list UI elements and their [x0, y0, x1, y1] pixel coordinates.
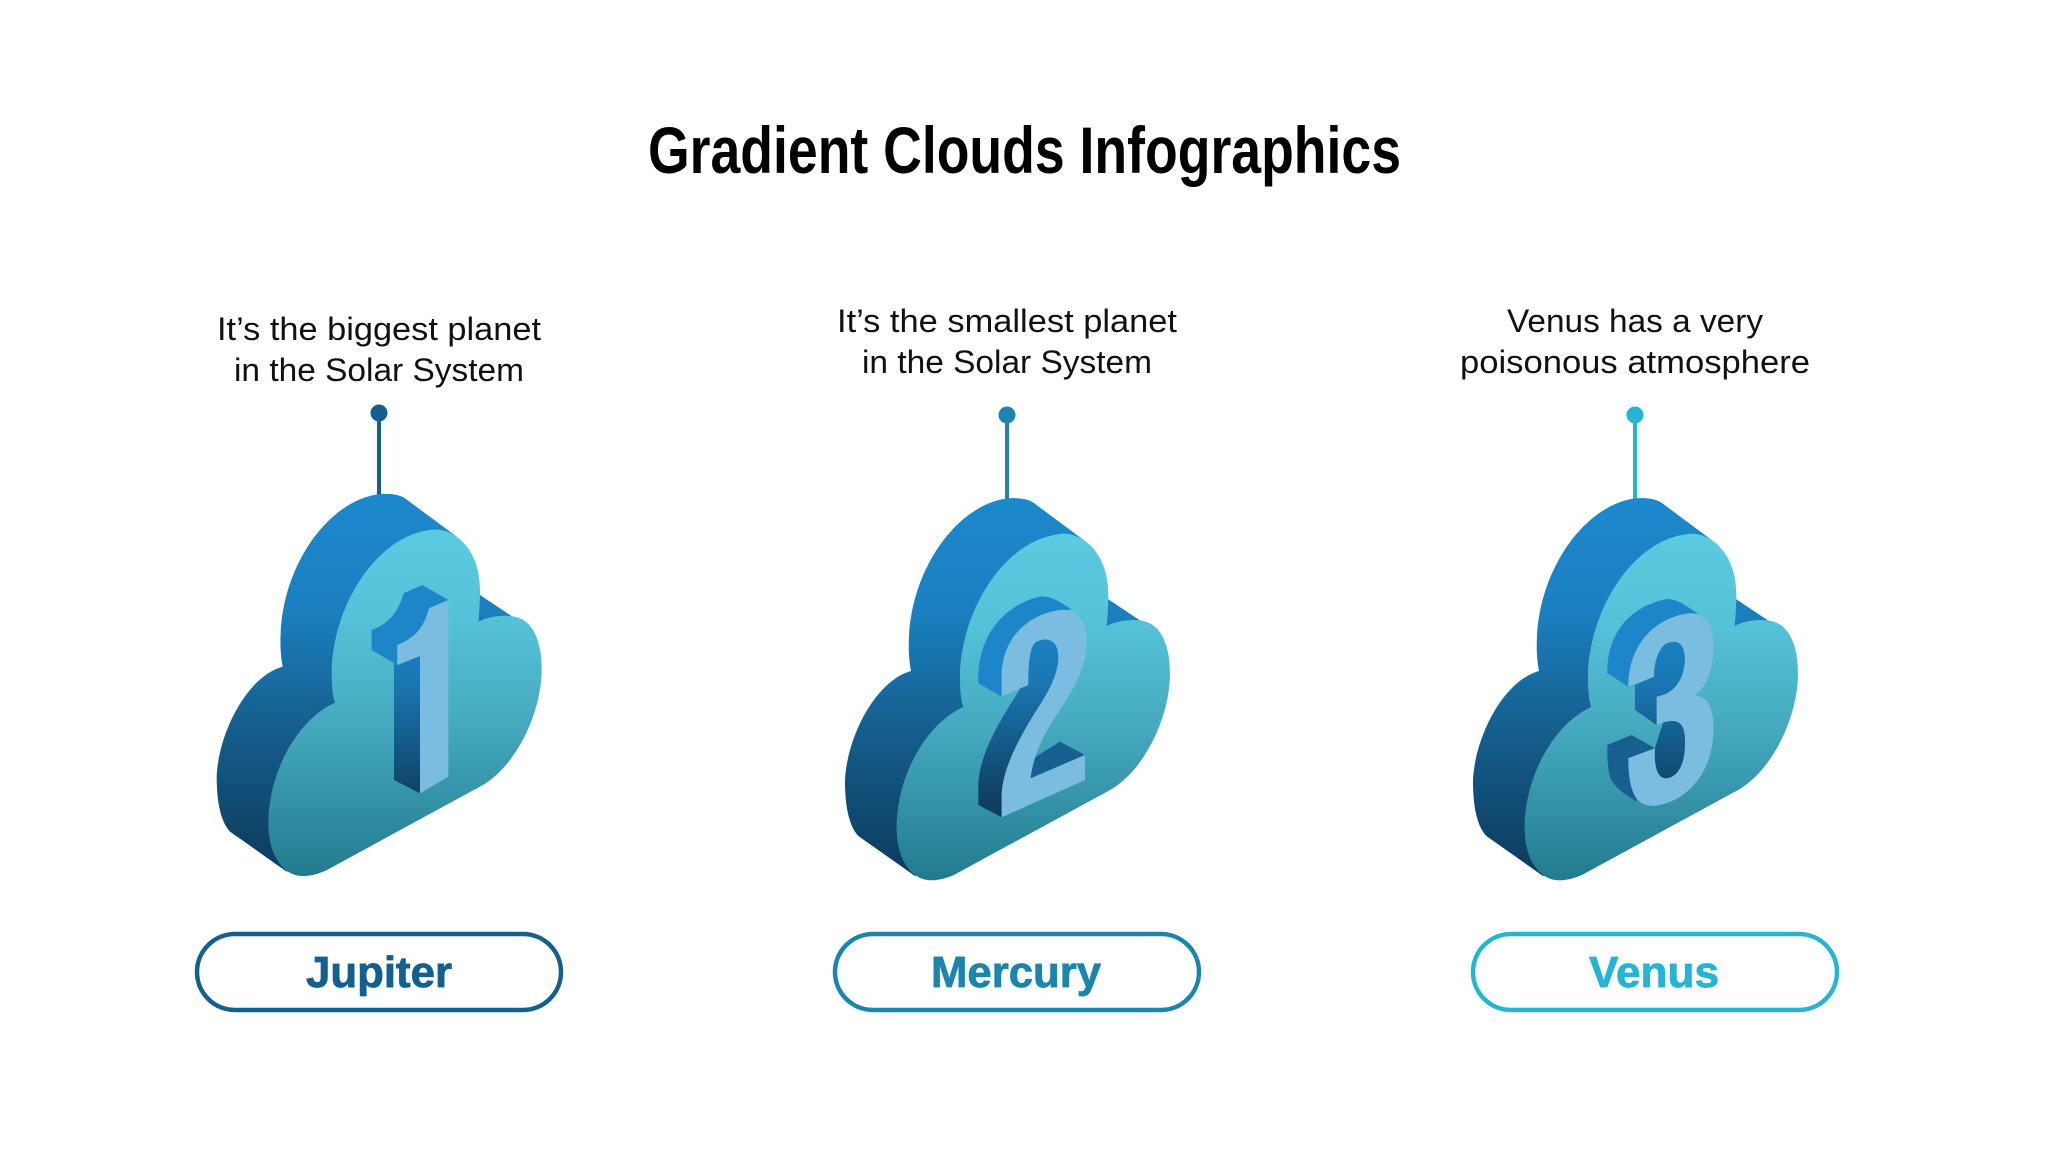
title: Gradient Clouds Infographics	[648, 113, 1401, 187]
panel: Venus	[1460, 303, 1837, 1010]
icon: isometric cloud 3	[1473, 498, 1798, 880]
panel: Mercury	[835, 303, 1199, 1010]
text: Venus description	[1460, 303, 1810, 380]
text: Mercury description: in the Solar System	[862, 344, 1152, 380]
icon: isometric cloud 2	[845, 498, 1170, 880]
connector pin 2	[998, 406, 1016, 500]
text: Mercury description	[837, 303, 1177, 380]
label pill: Venus	[1473, 934, 1837, 1010]
panel: Jupiter	[197, 311, 561, 1010]
text: Jupiter description: It’s the biggest planet	[217, 311, 541, 347]
icon: isometric cloud 1	[217, 494, 542, 876]
label pill: Mercury	[835, 934, 1199, 1010]
text: Venus description: Venus has a very	[1507, 303, 1763, 339]
text: Mercury description: It’s the smallest planet	[837, 303, 1177, 339]
text: Venus description: poisonous atmosphere	[1460, 344, 1810, 380]
numeral 1	[372, 585, 448, 793]
label pill: Jupiter: Jupiter	[306, 948, 452, 997]
label pill: Venus: Venus	[1589, 948, 1719, 997]
label pill: Jupiter	[197, 934, 561, 1010]
numeral 2	[978, 596, 1087, 817]
connector pin 1	[370, 404, 388, 496]
text: Jupiter description	[217, 311, 541, 388]
numeral 3	[1607, 599, 1714, 806]
text: Jupiter description: in the Solar System	[234, 352, 524, 388]
label pill: Mercury: Mercury	[931, 948, 1102, 997]
connector pin 3	[1626, 406, 1644, 500]
